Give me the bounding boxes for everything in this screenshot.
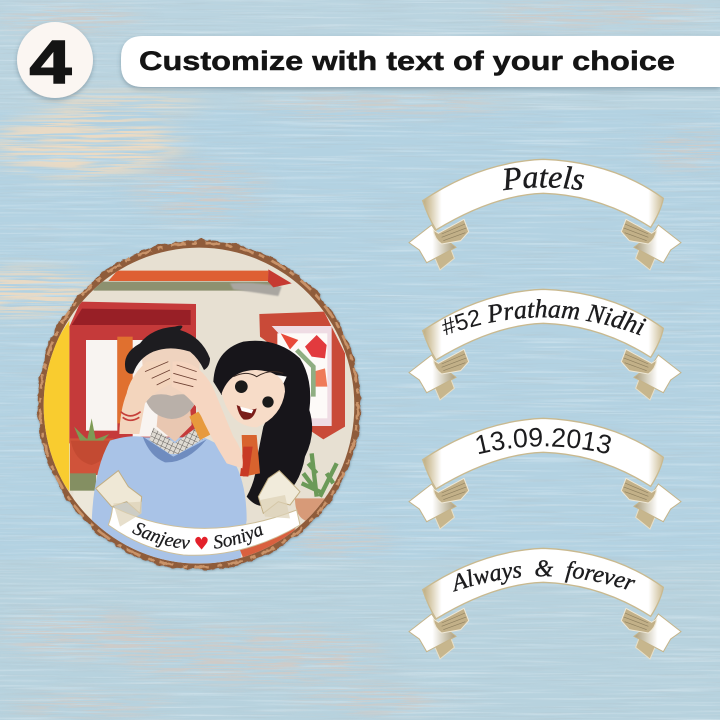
step number badge — [17, 22, 93, 98]
banner: #52 Pratham Nidhi — [408, 288, 682, 401]
yellow curtain — [44, 320, 70, 492]
wooden slice ornament — [36, 238, 363, 572]
banner: Patels — [408, 158, 682, 271]
man figure — [92, 326, 247, 563]
banner: 13.09.2013: 13.09.2013 — [476, 428, 611, 454]
bark rim — [38, 240, 360, 570]
illustration scene — [44, 248, 354, 564]
title pill — [121, 36, 720, 87]
couple names: Sanjeev ♥ Soniya — [132, 522, 264, 550]
left window — [69, 302, 196, 443]
banner: #52 Pratham Nidhi: #52 Pratham Nidhi — [442, 299, 646, 336]
red lower rim strip — [240, 527, 297, 558]
banner: Patels: Patels — [503, 166, 584, 190]
ceiling beam — [93, 269, 292, 296]
man hair — [125, 326, 210, 374]
banner: Always & forever: Always & forever — [453, 560, 636, 592]
step number badge: 4 — [30, 28, 72, 96]
woman arm and hand — [184, 370, 243, 468]
man arm and hand — [119, 366, 152, 434]
title pill: Customize with text of your choice — [139, 46, 675, 76]
name ribbon — [95, 470, 300, 556]
banner: 13.09.2013 — [408, 418, 682, 530]
right window — [259, 312, 345, 439]
banner: Always & forever — [408, 548, 682, 660]
right plant and pot — [295, 453, 337, 522]
potted plant — [70, 418, 113, 491]
woman figure — [172, 341, 312, 506]
